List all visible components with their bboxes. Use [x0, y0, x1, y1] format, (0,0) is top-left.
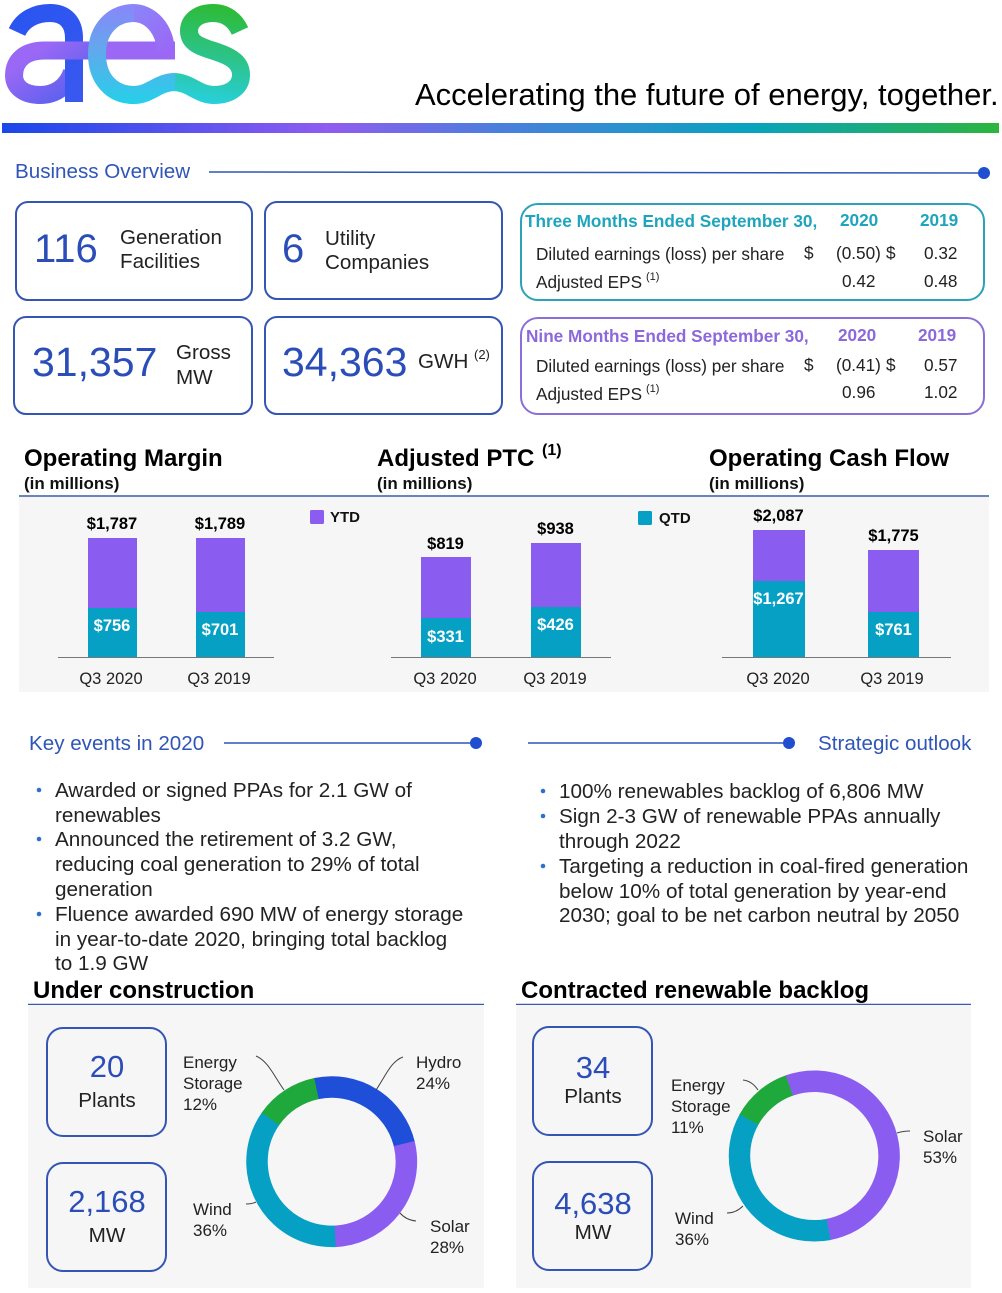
table: three months: 2019: [920, 210, 958, 230]
chart: adjusted PTC: (1): [542, 442, 562, 459]
chart: operating cash flow: $2,087: [753, 507, 804, 525]
chart: operating cash flow: [709, 445, 951, 688]
text block: key events bullets: in year-to-date 2020, bringing total backlog: [55, 928, 447, 951]
card: 20 plants: Plants: [78, 1089, 136, 1112]
card: 4,638 MW: MW: [575, 1221, 612, 1244]
text block: key events bullets: renewables: [55, 804, 161, 827]
card: 2,168 MW: [47, 1163, 166, 1271]
table: three months: $: [804, 243, 814, 263]
card: 34 plants: [533, 1027, 652, 1135]
chart: operating margin: [24, 445, 274, 688]
donut labels and leader lines: [671, 1076, 963, 1249]
stat card: utility companies: Companies: [325, 251, 429, 274]
chart: operating margin: $756: [94, 617, 130, 635]
text block: strategic outlook bullets: [541, 780, 968, 927]
chart: adjusted PTC: Q3 2019: [523, 670, 587, 688]
card: 20 plants: [47, 1028, 166, 1136]
text block: key events bullets: to 1.9 GW: [55, 952, 149, 975]
stat card: utility companies: Utility: [325, 227, 376, 250]
text block: key events bullets: generation: [55, 878, 153, 901]
chart: operating cash flow: Q3 2020: [746, 670, 810, 688]
section heading: strategic outlook: Strategic outlook: [818, 732, 972, 755]
donut chart: backlog mix: [712, 1054, 916, 1258]
chart: operating cash flow: Q3 2019: [860, 670, 924, 688]
panel: contracted renewable backlog: [516, 1005, 971, 1288]
text block: key events bullets: reducing coal generation to 29% of total: [55, 853, 420, 876]
card: 34 plants: 34: [576, 1050, 610, 1085]
chart: operating cash flow: $1,775: [868, 527, 919, 545]
chart: operating margin: $1,787: [87, 515, 137, 533]
legend: YTD: YTD: [330, 509, 360, 526]
stat card: utility companies: [265, 202, 502, 299]
logo: aes: [14, 13, 241, 102]
card: 2,168 MW: 2,168: [68, 1184, 146, 1219]
table: nine months: Adjusted EPS: [536, 384, 642, 404]
chart: operating cash flow: Operating Cash Flow: [709, 445, 949, 472]
table: three months: [521, 204, 984, 300]
donut labels and leader lines: 53%: [923, 1148, 957, 1167]
chart: adjusted PTC: [377, 442, 611, 688]
section heading: business overview: Business Overview: [15, 160, 190, 183]
heading: under construction: Under construction: [33, 977, 254, 1004]
text block: key events bullets: Fluence awarded 690 MW of energy storage: [55, 903, 463, 926]
section heading: strategic outlook: [528, 732, 972, 755]
table: three months: 2020: [840, 210, 878, 230]
donut labels and leader lines: 36%: [675, 1230, 709, 1249]
table: three months: Diluted earnings (loss) per share: [536, 244, 784, 264]
donut labels and leader lines: 12%: [183, 1095, 217, 1114]
chart: operating margin: Q3 2020: [79, 670, 143, 688]
card: 20 plants: 20: [90, 1049, 124, 1084]
stat card: gross MW: 31,357: [32, 339, 157, 385]
stat card: generation facilities: Generation: [120, 226, 222, 249]
stat card: generation facilities: 116: [34, 227, 98, 271]
legend: YTD: [310, 509, 360, 526]
table: three months: Three Months Ended September 30,: [525, 211, 817, 231]
tagline: Accelerating the future of energy, together.: [415, 77, 999, 112]
table: three months: (1): [646, 271, 659, 283]
table: three months: 0.42: [842, 271, 875, 291]
donut labels and leader lines: Wind: [675, 1209, 714, 1228]
card: 2,168 MW: MW: [89, 1224, 126, 1247]
chart: adjusted PTC: $426: [537, 616, 574, 634]
table: nine months: $: [804, 355, 814, 375]
table: nine months: 2019: [918, 325, 956, 345]
table: nine months: (1): [646, 383, 659, 395]
stat card: GWH: GWH: [418, 350, 468, 373]
donut labels and leader lines: Storage: [671, 1097, 731, 1116]
stat card: GWH: [265, 317, 502, 414]
text block: strategic outlook bullets: Sign 2-3 GW of renewable PPAs annually: [559, 805, 941, 828]
chart: operating margin: Q3 2019: [187, 670, 251, 688]
table: three months: $: [886, 243, 896, 263]
gradient header bar: [2, 123, 999, 133]
table: nine months: 0.57: [924, 355, 957, 375]
donut chart: under construction mix: [228, 1058, 436, 1266]
donut labels and leader lines: Energy: [671, 1076, 725, 1095]
table: three months: 0.48: [924, 271, 957, 291]
text block: strategic outlook bullets: below 10% of total generation by year-end: [559, 880, 947, 903]
donut labels and leader lines: Energy: [183, 1053, 237, 1072]
donut labels and leader lines: Wind: [193, 1200, 232, 1219]
table: nine months: Nine Months Ended September 30,: [526, 326, 809, 346]
card: 34 plants: Plants: [564, 1085, 622, 1108]
table: nine months: (0.41): [836, 355, 881, 375]
text block: strategic outlook bullets: 100% renewables backlog of 6,806 MW: [559, 780, 924, 803]
table: nine months: [521, 318, 984, 414]
section heading: business overview: [15, 160, 990, 183]
legend: QTD: QTD: [659, 510, 691, 527]
table: three months: (0.50): [836, 243, 881, 263]
chart: operating margin: $1,789: [195, 515, 245, 533]
donut labels and leader lines: Storage: [183, 1074, 243, 1093]
table: nine months: 0.96: [842, 382, 875, 402]
stat card: generation facilities: Facilities: [120, 250, 200, 273]
chart: operating cash flow: (in millions): [709, 474, 804, 493]
table: nine months: $: [886, 355, 896, 375]
card: 4,638 MW: 4,638: [554, 1186, 632, 1221]
chart: operating margin: $701: [202, 621, 238, 639]
text block: strategic outlook bullets: through 2022: [559, 830, 681, 853]
text block: key events bullets: Awarded or signed PPAs for 2.1 GW of: [55, 779, 412, 802]
text block: key events bullets: [37, 779, 463, 975]
chart: adjusted PTC: $819: [427, 535, 464, 553]
heading: contracted renewable backlog: Contracted renewable backlog: [521, 977, 869, 1004]
table: three months: Adjusted EPS: [536, 272, 642, 292]
donut labels and leader lines: 24%: [416, 1074, 450, 1093]
stat card: GWH: (2): [474, 347, 490, 362]
chart: operating cash flow: $761: [875, 621, 912, 639]
donut labels and leader lines: 36%: [193, 1221, 227, 1240]
chart: adjusted PTC: $938: [537, 520, 574, 538]
chart panel background: [19, 497, 989, 692]
stat card: gross MW: [14, 317, 252, 414]
text block: strategic outlook bullets: 2030; goal to be net carbon neutral by 2050: [559, 904, 959, 927]
donut labels and leader lines: 11%: [671, 1118, 704, 1137]
stat card: utility companies: 6: [282, 227, 304, 271]
chart: operating margin: Operating Margin: [24, 445, 223, 472]
chart header rule: [19, 495, 989, 497]
chart: adjusted PTC: Q3 2020: [413, 670, 477, 688]
donut labels and leader lines: Hydro: [416, 1053, 461, 1072]
chart: operating cash flow: $1,267: [753, 590, 804, 608]
donut labels and leader lines: 28%: [430, 1238, 464, 1257]
donut labels and leader lines: Solar: [923, 1127, 963, 1146]
panel: under construction: [28, 1005, 484, 1288]
chart: adjusted PTC: Adjusted PTC: [377, 445, 534, 472]
donut labels and leader lines: [183, 1053, 470, 1257]
chart: adjusted PTC: $331: [427, 628, 464, 646]
table: nine months: Diluted earnings (loss) per share: [536, 356, 784, 376]
section heading: key events: Key events in 2020: [29, 732, 204, 755]
chart: adjusted PTC: (in millions): [377, 474, 472, 493]
table: three months: 0.32: [924, 243, 957, 263]
stat card: GWH: 34,363: [282, 339, 407, 385]
stat card: gross MW: MW: [176, 366, 213, 389]
chart: operating margin: (in millions): [24, 474, 119, 493]
stat card: generation facilities: [16, 202, 252, 300]
legend: QTD: [638, 510, 691, 527]
section heading: key events: [29, 732, 482, 755]
stat card: gross MW: Gross: [176, 341, 231, 364]
text block: strategic outlook bullets: Targeting a reduction in coal-fired generation: [559, 855, 968, 878]
card: 4,638 MW: [533, 1162, 652, 1270]
text block: key events bullets: Announced the retirement of 3.2 GW,: [55, 828, 397, 851]
table: nine months: 1.02: [924, 382, 957, 402]
table: nine months: 2020: [838, 325, 876, 345]
donut labels and leader lines: Solar: [430, 1217, 470, 1236]
